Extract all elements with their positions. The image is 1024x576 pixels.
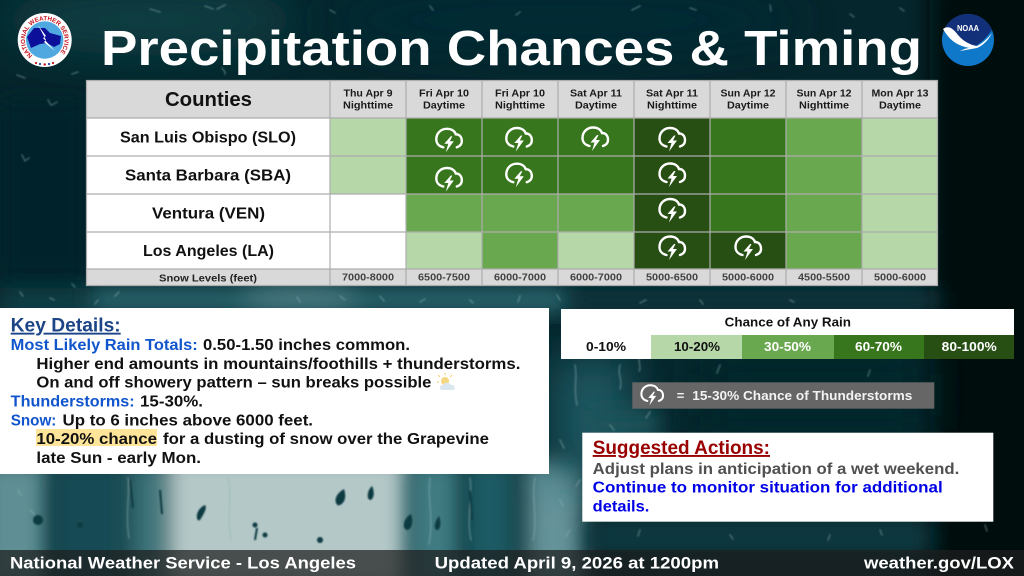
snow lines: Snow:	[11, 413, 56, 430]
snow lines	[11, 413, 489, 467]
legend: thunderstorm key: 15-30% Chance of Thunderstorms	[692, 388, 912, 403]
county column: Los Angeles (LA)	[143, 243, 274, 260]
thunderstorms line: Thunderstorms:	[11, 394, 135, 411]
footer: update time: Updated April 9, 2026 at 1200pm	[435, 554, 719, 572]
legend swatch 10-20%: 10-20%	[674, 339, 720, 354]
snow levels: 6500-7500	[418, 272, 470, 284]
column headers: Nighttime	[495, 100, 545, 112]
panel: suggested actions	[582, 433, 993, 522]
legend: chance of any rain: Chance of Any Rain	[725, 315, 851, 330]
column headers: Daytime	[423, 100, 465, 112]
row: Santa Barbara cells	[330, 156, 938, 194]
thunderstorms line	[11, 394, 203, 411]
legend: thunderstorm key: =	[677, 388, 685, 403]
column headers: Sun Apr 12	[720, 88, 776, 100]
column headers: Nighttime	[647, 100, 697, 112]
column headers	[343, 88, 929, 112]
rain totals: 0.50-1.50 inches common.	[203, 337, 410, 354]
snow levels: 5000-6000	[722, 272, 774, 284]
column headers: Mon Apr 13	[872, 88, 929, 100]
monitor text: Continue to monitor situation for additional	[593, 480, 943, 497]
rain totals	[11, 337, 520, 392]
logo: NOAA	[942, 14, 994, 66]
footer bar	[0, 550, 1024, 576]
logo: National Weather Service: NATIONAL WEATHER SERVICE	[20, 16, 69, 58]
snow levels: 6000-7000	[494, 272, 546, 284]
legend: thunderstorm key	[632, 382, 934, 409]
column headers: Nighttime	[799, 100, 849, 112]
table grid lines	[86, 80, 938, 286]
legend swatch 10-20%	[651, 335, 742, 359]
column headers: Daytime	[727, 100, 769, 112]
legend: chance of any rain	[561, 309, 1014, 359]
heading: suggested actions: Suggested Actions:	[593, 438, 770, 459]
panel: key details	[0, 308, 549, 474]
heading: key details: Key Details:	[11, 316, 121, 337]
logo: NOAA: NOAA	[957, 23, 979, 33]
monitor text: details.	[593, 499, 649, 516]
snow levels: 4500-5500	[798, 272, 850, 284]
column headers: Nighttime	[343, 100, 393, 112]
county column	[87, 89, 330, 284]
rain totals: On and off showery pattern – sun breaks possible	[36, 375, 432, 392]
legend swatch 80-100%: 80-100%	[942, 339, 997, 354]
footer: office: National Weather Service - Los Angeles	[10, 554, 356, 572]
monitor text	[593, 480, 943, 516]
row: Los Angeles cells	[330, 232, 938, 269]
column headers: Fri Apr 10	[495, 88, 545, 100]
snow lines: Up to 6 inches above 6000 feet.	[62, 413, 313, 430]
legend swatch 60-70%: 60-70%	[855, 339, 902, 354]
icon: thunderstorm	[641, 385, 663, 405]
table: precipitation chances by county and period	[86, 80, 938, 286]
rain totals: Higher end amounts in mountains/foothills + thunderstorms.	[36, 356, 520, 373]
title: Precipitation Chances & Timing	[101, 22, 922, 76]
rain totals: Most Likely Rain Totals:	[11, 337, 198, 354]
snow levels	[342, 272, 926, 284]
snow levels: 5000-6000	[874, 272, 926, 284]
snow levels: 5000-6500	[646, 272, 698, 284]
legend swatch 0-10%	[561, 335, 651, 359]
column headers: Sat Apr 11	[570, 88, 622, 100]
county column: Santa Barbara (SBA)	[125, 168, 291, 184]
legend swatch 30-50%	[742, 335, 834, 359]
snow lines: for a dusting of snow over the Grapevine	[163, 431, 489, 448]
column headers: Fri Apr 10	[419, 88, 469, 100]
action text: Adjust plans in anticipation of a wet weekend.	[593, 461, 959, 478]
column headers: Sun Apr 12	[796, 88, 852, 100]
county column: Counties	[165, 89, 252, 111]
legend swatch 60-70%	[834, 335, 924, 359]
thunderstorms line: 15-30%.	[140, 394, 203, 411]
snow lines: late Sun - early Mon.	[36, 450, 201, 467]
legend swatch 0-10%: 0-10%	[586, 339, 626, 354]
column headers: Thu Apr 9	[344, 88, 393, 100]
snow levels: 7000-8000	[342, 272, 394, 284]
snow lines: 10-20% chance	[36, 431, 157, 448]
county column: San Luis Obispo (SLO)	[120, 130, 296, 147]
icon: sun behind cloud	[437, 373, 455, 390]
legend swatch 30-50%: 30-50%	[764, 339, 811, 354]
county column: Snow Levels (feet)	[159, 272, 257, 284]
column headers: Sat Apr 11	[646, 88, 698, 100]
legend swatch 80-100%	[924, 335, 1014, 359]
row: San Luis Obispo cells	[330, 118, 938, 156]
row: Ventura cells	[330, 194, 938, 232]
footer: website: weather.gov/LOX	[863, 554, 1014, 572]
column headers: Daytime	[575, 100, 617, 112]
column headers: Daytime	[879, 100, 921, 112]
icons: thunderstorm markers	[436, 128, 761, 260]
county column: Ventura (VEN)	[152, 206, 265, 222]
snow levels: 6000-7000	[570, 272, 622, 284]
